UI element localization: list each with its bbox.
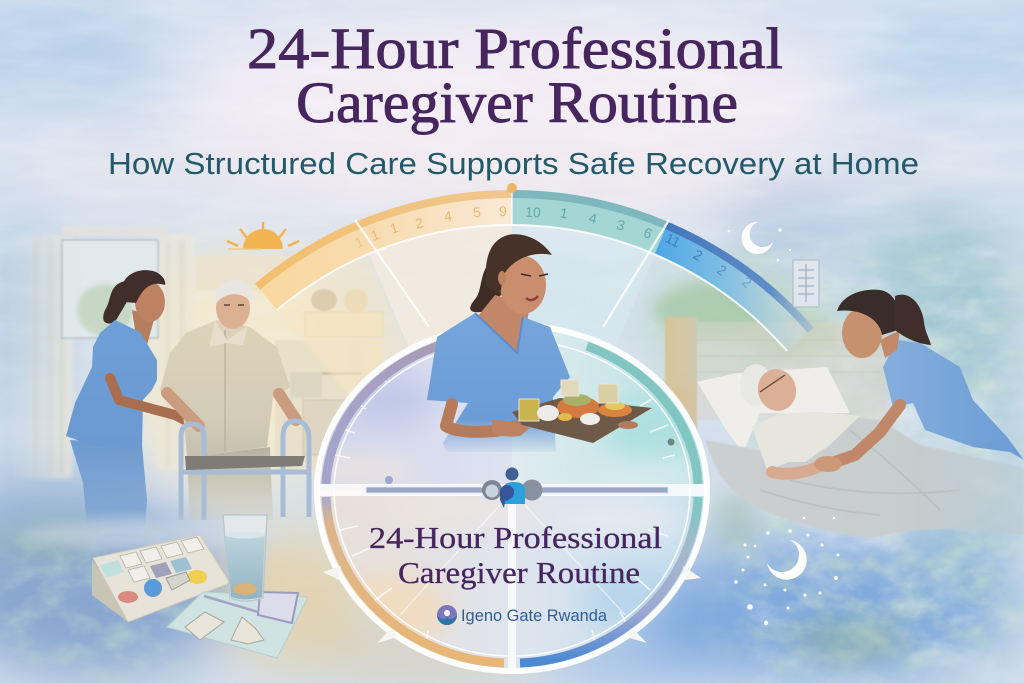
man face	[216, 287, 250, 329]
nurse hair	[837, 290, 899, 335]
window	[62, 226, 168, 338]
forearm	[446, 404, 518, 432]
hour numbers	[352, 203, 755, 291]
dial face	[320, 341, 704, 668]
walking assistance scene: nurse and elderly man with walker	[20, 270, 309, 549]
nurse face	[135, 282, 165, 322]
curtains	[8, 235, 195, 478]
nurse pants	[70, 440, 147, 530]
hour numbers: 2	[691, 246, 706, 264]
building icon	[793, 260, 819, 307]
nurse neck	[132, 310, 155, 345]
afternoon segment	[512, 212, 660, 242]
neck	[478, 295, 530, 355]
medication organizer, pill box	[92, 535, 230, 622]
face	[500, 256, 546, 314]
hour numbers: 9	[499, 203, 507, 219]
hour numbers: 3	[615, 216, 627, 234]
man forearms	[167, 393, 296, 426]
hour numbers: 6	[641, 224, 655, 242]
nurse ponytail	[103, 281, 128, 324]
subtitle: How Structured Care Supports Safe Recovery at Home	[108, 146, 919, 181]
meal tray	[512, 380, 652, 443]
sector fills	[281, 226, 695, 392]
crescent moon and stars, lower	[734, 517, 840, 625]
nurse arm	[832, 405, 900, 463]
main title	[247, 16, 783, 135]
man collar	[209, 320, 248, 347]
ear	[498, 271, 506, 285]
man trousers	[187, 447, 273, 520]
blanket	[705, 414, 1024, 538]
top marker	[507, 183, 517, 193]
patient hair	[740, 364, 772, 406]
room scene: window, curtains and shelves	[8, 226, 383, 478]
ring pointers	[323, 566, 701, 643]
hour numbers: 2	[739, 273, 755, 291]
divider cross	[317, 484, 707, 670]
scrub top	[427, 313, 570, 452]
centre dial title: Caregiver Routine	[398, 555, 640, 590]
medication tray with pills and tablet	[167, 592, 308, 658]
nurse scrub	[883, 340, 1007, 447]
divider bar	[366, 487, 668, 493]
walker frame	[181, 421, 309, 520]
nurse arm	[110, 378, 196, 426]
patient arm	[772, 464, 825, 474]
centre dial title	[369, 520, 662, 590]
main title: Caregiver Routine	[296, 70, 738, 135]
nurse neck	[880, 330, 900, 358]
nurse ponytail	[895, 295, 931, 345]
foliage and headboard	[655, 282, 887, 435]
hour numbers: 1	[368, 226, 382, 244]
sun icon	[227, 222, 299, 249]
morning segment	[269, 212, 512, 300]
nurse scrub top	[66, 320, 157, 448]
speech bubble icon cluster	[482, 468, 542, 508]
nurse carrying meal tray	[427, 234, 652, 452]
nurse face	[842, 308, 882, 358]
glass of water	[223, 515, 267, 601]
floor mist	[20, 521, 280, 549]
centre clock dial	[300, 323, 710, 673]
hair back	[470, 262, 505, 312]
haze green patches	[0, 492, 910, 662]
man shirt	[160, 320, 290, 457]
hour numbers: 4	[443, 207, 453, 225]
hour numbers: 1	[352, 233, 366, 251]
smile	[526, 296, 538, 300]
hour numbers: 1	[559, 205, 569, 221]
hour numbers: 11	[663, 230, 683, 250]
headboard	[665, 317, 887, 435]
hair	[486, 234, 552, 296]
patient glasses	[760, 375, 785, 392]
clasped hands	[814, 456, 842, 472]
main title: 24-Hour Professional	[247, 16, 783, 81]
hour numbers: 2	[414, 214, 425, 232]
logo: Igeno Gate Rwanda: Igeno Gate Rwanda	[461, 607, 608, 625]
centre dial title: 24-Hour Professional	[369, 520, 662, 555]
hour numbers: 1	[388, 219, 400, 237]
walker seat	[185, 456, 305, 470]
hour numbers: 2	[714, 261, 730, 279]
hour numbers: 10	[525, 204, 541, 220]
nurse hair	[122, 270, 165, 303]
man hair	[215, 280, 252, 304]
pillow	[697, 367, 850, 452]
dial ticks and spokes	[335, 372, 675, 650]
hour numbers: 4	[588, 209, 599, 227]
bedside care scene: nurse holding hands with patient in bed	[697, 290, 1024, 538]
crescent moon and stars, upper	[728, 222, 791, 261]
arc dividers	[355, 220, 669, 327]
night segment	[660, 242, 798, 342]
ring outlines	[317, 325, 707, 671]
hour numbers: 5	[472, 204, 482, 220]
colour ring segments	[326, 333, 698, 663]
patient face	[753, 365, 801, 415]
patient shirt	[752, 412, 860, 470]
hands	[492, 420, 530, 436]
shelves	[196, 255, 383, 470]
